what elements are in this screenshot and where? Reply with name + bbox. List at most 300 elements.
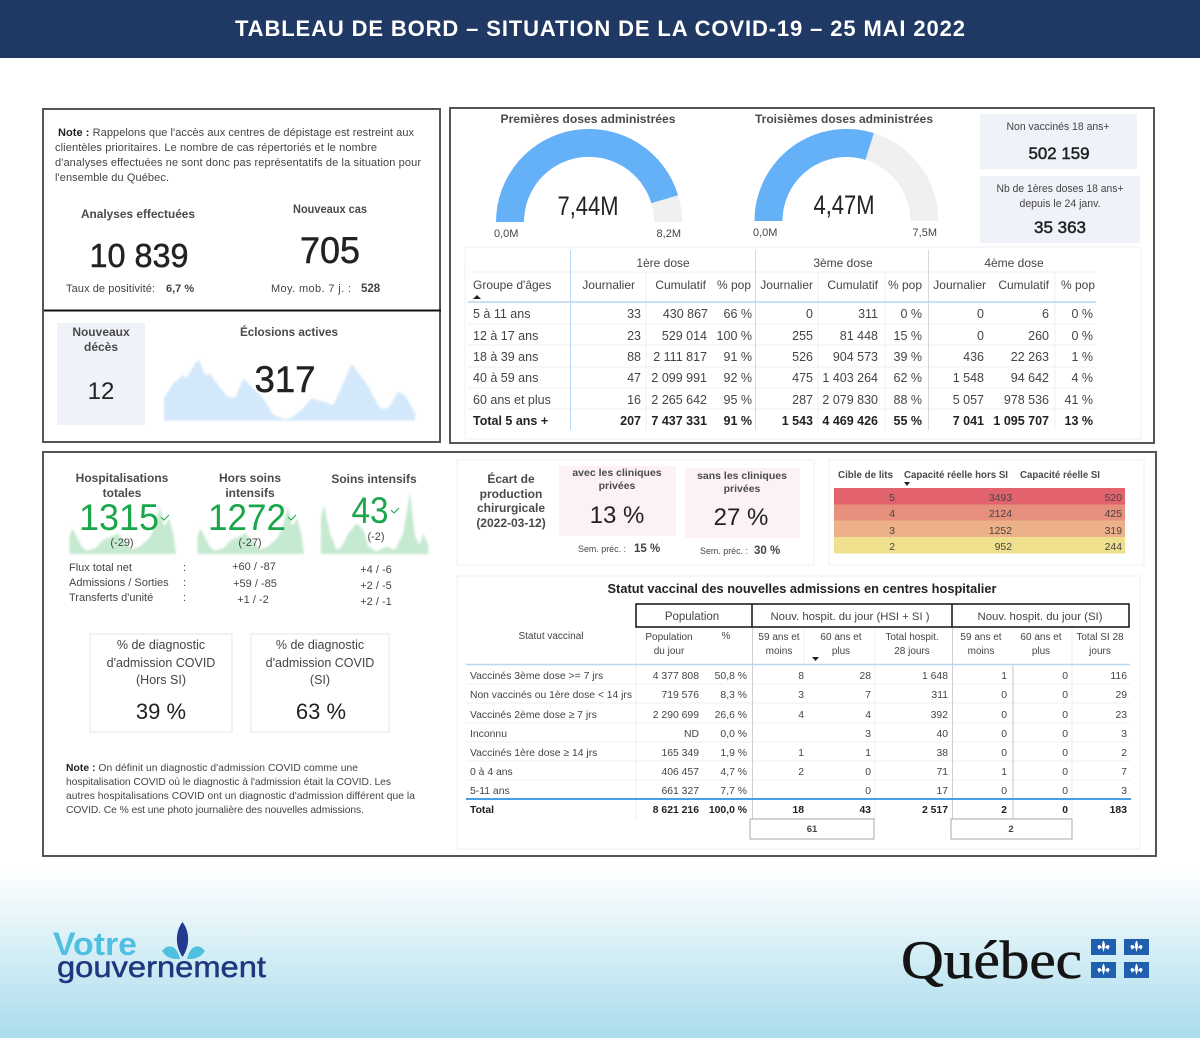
row: 5 à 11 ans: 0 %	[900, 307, 922, 321]
row: total: Total	[470, 805, 494, 816]
card: sans les cliniques privées: privées	[724, 483, 761, 495]
KPI: hospitalisations totales: (-29)	[110, 537, 134, 549]
logo: Québec	[901, 930, 1149, 990]
row: 18 à 39 ans	[473, 350, 1093, 364]
column headers: Groupe d'âges	[473, 278, 551, 292]
column headers: 59 ans et	[758, 632, 800, 643]
row: inconnu: 0,0 %	[720, 729, 747, 740]
row: 60 ans et plus: 2 079 830	[822, 393, 878, 407]
row: total: 43	[859, 805, 871, 816]
flow breakdown rows: +2 / -1	[360, 596, 392, 608]
flow breakdown rows: Admissions / Sorties	[69, 577, 169, 589]
row: 5-11 ans: 0	[1062, 786, 1068, 797]
card: sans les cliniques privées	[685, 468, 800, 557]
logo: Votre gouvernement	[53, 922, 267, 984]
KPI: hospitalisations totales: Hospitalisations	[76, 471, 169, 485]
flow breakdown rows: :	[183, 592, 186, 604]
row: cible 2: 2	[889, 542, 895, 553]
row: 60 ans et plus	[473, 393, 1093, 407]
sparkline: soins intensifs	[321, 492, 428, 554]
flow breakdown rows: +59 / -85	[233, 578, 277, 590]
row: 18 à 39 ans: 39 %	[894, 350, 922, 364]
row: 40 à 59 ans	[473, 371, 1093, 385]
table: doses par groupe d'âges	[465, 247, 1141, 439]
row: 18 à 39 ans: 88	[627, 350, 641, 364]
gauge: premières doses	[494, 112, 682, 240]
column headers: Cumulatif	[998, 278, 1050, 292]
grouped header box: Population	[665, 611, 719, 623]
row: inconnu: 40	[936, 729, 948, 740]
KPI card: nouveaux décès	[57, 323, 145, 425]
KPI: soins intensifs: Soins intensifs	[331, 472, 417, 486]
testing note	[55, 127, 421, 184]
row: 18 à 39 ans: 436	[963, 350, 984, 364]
sparkline: éclosions actives	[164, 360, 415, 421]
row: 5 à 11 ans: 66 %	[724, 307, 752, 321]
KPI: nouveaux cas: 528	[361, 283, 381, 295]
sparkline: hospitalisations totales	[69, 507, 176, 554]
column headers: 28 jours	[894, 646, 930, 657]
gauge: troisièmes doses: 4,47M	[814, 190, 874, 220]
row: total: 183	[1110, 805, 1127, 816]
row: vaccinés 1re dose: Vaccinés 1ère dose ≥ 14 jrs	[470, 748, 597, 759]
column headers: 59 ans et	[960, 632, 1002, 643]
KPI: analyses effectuées: Taux de positivité:	[66, 283, 155, 295]
card: sans les cliniques privées: sans les cliniques	[697, 470, 787, 482]
row: vaccinés 3e dose: Vaccinés 3ème dose >= 7 jrs	[470, 671, 603, 682]
flow breakdown rows: +1 / -2	[237, 594, 269, 606]
KPI: analyses effectuées	[66, 207, 195, 295]
row: 5 à 11 ans: 0	[977, 307, 984, 321]
row: cible 2: 952	[995, 542, 1012, 553]
row: 12 à 17 ans: 0 %	[1071, 329, 1093, 343]
KPI card: premières doses depuis le 24 janvier	[980, 176, 1140, 243]
flow breakdown rows: Transferts d'unité	[69, 592, 153, 604]
total box: hospit. du jour: 61	[807, 824, 818, 835]
KPI card: diagnostic COVID SI: % de diagnostic	[276, 638, 364, 652]
grouped header box	[636, 604, 1129, 627]
column headers: 60 ans et	[1020, 632, 1062, 643]
card: avec les cliniques privées: avec les cliniques	[572, 467, 662, 479]
row: 12 à 17 ans	[473, 329, 1093, 343]
grouped header box: Nouv. hospit. du jour (SI)	[978, 611, 1102, 623]
KPI: nouveaux cas: Nouveaux cas	[293, 204, 367, 216]
card: sans les cliniques privées: 30 %	[754, 545, 780, 557]
row: 18 à 39 ans: 904 573	[833, 350, 878, 364]
row: vaccinés 3e dose: 4 377 808	[653, 671, 699, 682]
row: 0 à 4 ans: 0	[865, 767, 871, 778]
row: total 5 ans et plus: 55 %	[894, 414, 922, 428]
column headers: moins	[968, 646, 994, 657]
row: 12 à 17 ans: 0	[977, 329, 984, 343]
row: vaccinés 1re dose	[470, 748, 1127, 759]
KPI: hospitalisations totales: totales	[103, 486, 142, 500]
gauge: troisièmes doses: 7,5M	[913, 227, 937, 239]
row: cible 4	[834, 504, 1125, 520]
row: total 5 ans et plus: 7 041	[953, 414, 984, 428]
capacity header: Capacité réelle hors SI	[904, 469, 1008, 481]
column headers: % pop	[717, 278, 751, 292]
row: inconnu: ND	[684, 729, 699, 740]
section label: chirurgicale	[477, 501, 545, 515]
row: inconnu: 0	[1001, 729, 1007, 740]
row: cible 3	[834, 520, 1125, 537]
row: 5-11 ans: 661 327	[661, 786, 699, 797]
flow breakdown rows	[69, 561, 392, 608]
row: 5-11 ans	[470, 786, 1127, 797]
row: vaccinés 3e dose: 1	[1001, 671, 1007, 682]
row: 5-11 ans: 7,7 %	[720, 786, 747, 797]
gauge: premières doses: 8,2M	[657, 228, 681, 240]
flow breakdown rows: +2 / -5	[360, 580, 392, 592]
row: 60 ans et plus: 41 %	[1064, 393, 1093, 407]
row: vaccinés 3e dose	[470, 671, 1127, 682]
column headers: Total SI 28	[1076, 632, 1124, 643]
KPI card: non vaccinés: 502 159	[1028, 144, 1090, 163]
KPI card: non vaccinés: Non vaccinés 18 ans+	[1006, 121, 1110, 133]
row: inconnu: 3	[865, 729, 871, 740]
panel: capacité de lits	[829, 460, 1144, 565]
row: cible 4: 4	[889, 509, 895, 520]
column headers	[518, 631, 1124, 661]
table title: Statut vaccinal des nouvelles admissions en centres hospitalier	[608, 581, 996, 596]
column headers: Population	[645, 632, 693, 643]
row: non vaccinés	[470, 690, 1127, 701]
column headers: du jour	[654, 646, 685, 657]
row: vaccinés 2e dose: 4	[798, 710, 804, 721]
column headers: %	[722, 631, 731, 642]
sparkline: hors soins intensifs	[197, 507, 304, 554]
row: non vaccinés: 7	[865, 690, 871, 701]
row: 18 à 39 ans: 22 263	[1011, 350, 1049, 364]
row: inconnu: Inconnu	[470, 729, 507, 740]
KPI: éclosions actives: Éclosions actives	[240, 324, 338, 339]
testing note: Note : Rappelons que l'accès aux centres de dépistage est restreint aux	[58, 127, 414, 139]
row: non vaccinés: 3	[798, 690, 804, 701]
header banner	[0, 0, 1200, 58]
row: 12 à 17 ans: 255	[792, 329, 813, 343]
row: non vaccinés: Non vaccinés ou 1ère dose < 14 jrs	[470, 690, 632, 701]
dose group headers: 4ème dose	[984, 256, 1044, 270]
KPI: soins intensifs: 43	[352, 490, 388, 531]
row: 60 ans et plus: 2 265 642	[651, 393, 707, 407]
row: 18 à 39 ans: 18 à 39 ans	[473, 350, 538, 364]
icon: fleur-de-lis	[162, 922, 205, 959]
row: total 5 ans et plus: 207	[620, 414, 641, 428]
row: 5-11 ans: 0	[1001, 786, 1007, 797]
KPI card: diagnostic COVID hors SI: 39 %	[136, 699, 186, 724]
panel: vaccination	[450, 108, 1154, 443]
testing note: d'analyses effectuées ne sont donc pas représentatifs de la situation pour	[55, 157, 421, 169]
flow breakdown rows: +4 / -6	[360, 564, 392, 576]
diagnostic note: hospitalisation COVID où le diagnostic à l'admission était la COVID. Les	[66, 777, 391, 788]
row: 40 à 59 ans: 47	[627, 371, 641, 385]
row: 0 à 4 ans: 0	[1062, 767, 1068, 778]
dose group headers: 1ère dose	[636, 256, 690, 270]
column headers: jours	[1088, 646, 1111, 657]
KPI card: diagnostic COVID hors SI	[90, 634, 232, 732]
row: total 5 ans et plus: 91 %	[724, 414, 752, 428]
row: 5 à 11 ans: 0 %	[1071, 307, 1093, 321]
column headers: Journalier	[582, 278, 635, 292]
KPI card: nouveaux décès: Nouveaux	[72, 325, 130, 339]
panel: hospitalisations	[43, 452, 1156, 856]
row: vaccinés 2e dose: 23	[1115, 710, 1127, 721]
row: 40 à 59 ans: 62 %	[894, 371, 922, 385]
row: 60 ans et plus: 287	[792, 393, 813, 407]
logo: Votre gouvernement: gouvernement	[57, 951, 267, 984]
KPI: nouveaux cas: Moy. mob. 7 j. :	[271, 283, 351, 295]
row: total: 0	[1062, 805, 1068, 816]
KPI: analyses effectuées: Analyses effectuées	[81, 207, 195, 221]
row: non vaccinés: 0	[1062, 690, 1068, 701]
row: 0 à 4 ans: 4,7 %	[720, 767, 747, 778]
KPI: analyses effectuées: 10 839	[90, 237, 188, 274]
row: 0 à 4 ans	[470, 767, 1127, 778]
KPI card: diagnostic COVID hors SI: d'admission COVID	[107, 656, 215, 670]
row: 60 ans et plus: 5 057	[953, 393, 984, 407]
row: total: 100,0 %	[709, 805, 747, 816]
row: cible 5	[834, 488, 1125, 504]
dose group headers	[636, 256, 1044, 270]
row: vaccinés 1re dose: 38	[936, 748, 948, 759]
row: vaccinés 3e dose: 28	[859, 671, 871, 682]
row: 5 à 11 ans: 0	[806, 307, 813, 321]
row: vaccinés 2e dose	[470, 710, 1127, 721]
row: total	[470, 805, 1127, 816]
KPI: hospitalisations totales	[76, 471, 169, 549]
row: 40 à 59 ans: 475	[792, 371, 813, 385]
row: vaccinés 3e dose: 1 648	[922, 671, 948, 682]
row: total 5 ans et plus: 13 %	[1064, 414, 1093, 428]
row: cible 3: 1252	[989, 526, 1012, 537]
row: vaccinés 2e dose: 4	[865, 710, 871, 721]
column headers: 60 ans et	[820, 632, 862, 643]
row: cible 5: 520	[1105, 493, 1122, 504]
KPI: hors soins intensifs: 1272	[208, 497, 286, 538]
gauge: premières doses: 7,44M	[558, 191, 618, 221]
row: inconnu	[470, 729, 1127, 740]
section label	[476, 471, 546, 530]
gauge: premières doses: 0,0M	[494, 228, 518, 240]
row: cible 2: 244	[1105, 542, 1122, 553]
column headers: % pop	[1061, 278, 1095, 292]
row: vaccinés 3e dose: 50,8 %	[715, 671, 747, 682]
row: 0 à 4 ans: 406 457	[661, 767, 699, 778]
row: non vaccinés: 8,3 %	[720, 690, 747, 701]
row: 5-11 ans: 17	[936, 786, 948, 797]
KPI card: premières doses depuis le 24 janvier: 35 363	[1034, 218, 1086, 237]
row: total 5 ans et plus: Total 5 ans +	[473, 414, 548, 428]
row: vaccinés 1re dose: 1	[798, 748, 804, 759]
row: total: 2	[1001, 805, 1007, 816]
panel: tests, cases, deaths, outbreaks	[43, 109, 441, 442]
row: total: 8 621 216	[653, 805, 699, 816]
row: 5-11 ans: 5-11 ans	[470, 786, 510, 797]
row: vaccinés 2e dose: 0	[1062, 710, 1068, 721]
header banner: TABLEAU DE BORD – SITUATION DE LA COVID-19 – 25 MAI 2022	[235, 16, 965, 41]
row: 12 à 17 ans: 260	[1028, 329, 1049, 343]
KPI: hors soins intensifs	[208, 471, 296, 549]
gauge: troisièmes doses: Troisièmes doses administrées	[755, 112, 933, 126]
row: 60 ans et plus: 16	[627, 393, 641, 407]
card: avec les cliniques privées: 13 %	[590, 502, 644, 529]
KPI card: non vaccinés	[980, 114, 1137, 169]
row: 0 à 4 ans: 2	[798, 767, 804, 778]
row: 40 à 59 ans: 4 %	[1071, 371, 1093, 385]
KPI card: diagnostic COVID hors SI: (Hors SI)	[136, 673, 186, 687]
KPI card: diagnostic COVID SI	[251, 634, 389, 732]
row: vaccinés 1re dose: 0	[1001, 748, 1007, 759]
gauge: troisièmes doses	[753, 112, 938, 239]
row: 5 à 11 ans: 430 867	[663, 307, 708, 321]
KPI: nouveaux cas	[271, 204, 381, 295]
row: cible 5: 3493	[989, 493, 1012, 504]
column headers	[473, 278, 1095, 299]
row: 0 à 4 ans: 1	[1001, 767, 1007, 778]
gauge: premières doses: Premières doses administrées	[500, 112, 676, 126]
KPI card: nouveaux décès: 12	[88, 378, 114, 405]
row: total 5 ans et plus: 1 095 707	[993, 414, 1049, 428]
KPI: analyses effectuées: 6,7 %	[166, 283, 194, 295]
KPI card: nouveaux décès: décès	[84, 340, 118, 354]
section label: Écart de	[487, 471, 535, 486]
KPI: éclosions actives: 317	[254, 359, 316, 400]
capacity header: Cible de lits	[838, 469, 893, 481]
row: vaccinés 1re dose: 1,9 %	[720, 748, 747, 759]
KPI card: diagnostic COVID SI: d'admission COVID	[266, 656, 374, 670]
row: 12 à 17 ans: 81 448	[840, 329, 878, 343]
row: non vaccinés: 29	[1115, 690, 1127, 701]
row: 5-11 ans: 3	[1121, 786, 1127, 797]
row: 5 à 11 ans: 311	[858, 307, 878, 321]
KPI: hors soins intensifs: (-27)	[238, 537, 262, 549]
column headers: Journalier	[933, 278, 986, 292]
row: total: 2 517	[922, 805, 948, 816]
row: vaccinés 2e dose: 392	[931, 710, 948, 721]
card: sans les cliniques privées: Sem. préc. :	[700, 546, 748, 557]
row: total 5 ans et plus: 4 469 426	[822, 414, 878, 428]
row: vaccinés 1re dose: 0	[1062, 748, 1068, 759]
card: sans les cliniques privées: 27 %	[714, 504, 768, 531]
card: avec les cliniques privées: privées	[599, 480, 636, 492]
row: total 5 ans et plus	[473, 414, 1093, 428]
diagnostic note: COVID. Ce % est une photo journalière des nouvelles admissions.	[66, 805, 364, 816]
row: 60 ans et plus: 978 536	[1004, 393, 1049, 407]
row: 12 à 17 ans: 23	[627, 329, 641, 343]
KPI card: premières doses depuis le 24 janvier: Nb de 1ères doses 18 ans+	[996, 183, 1124, 195]
column headers: Total hospit.	[885, 632, 939, 643]
row: 60 ans et plus: 60 ans et plus	[473, 393, 551, 407]
row: 0 à 4 ans: 7	[1121, 767, 1127, 778]
row: cible 3: 3	[889, 526, 895, 537]
column headers: Journalier	[760, 278, 813, 292]
row: 5 à 11 ans: 6	[1042, 307, 1049, 321]
KPI card: premières doses depuis le 24 janvier: depuis le 24 janv.	[1020, 198, 1100, 210]
diagnostic note	[66, 763, 415, 816]
row: 60 ans et plus: 88 %	[894, 393, 922, 407]
row: 18 à 39 ans: 91 %	[724, 350, 752, 364]
KPI: hors soins intensifs: intensifs	[225, 486, 275, 500]
column headers: Cumulatif	[827, 278, 879, 292]
capacity header: Capacité réelle SI	[1020, 469, 1100, 481]
flow breakdown rows: :	[183, 577, 186, 589]
row: 40 à 59 ans: 40 à 59 ans	[473, 371, 538, 385]
gauge: troisièmes doses: 0,0M	[753, 227, 777, 239]
column headers: moins	[766, 646, 792, 657]
row: inconnu: 0	[1062, 729, 1068, 740]
row: 5-11 ans: 0	[865, 786, 871, 797]
logo: Québec: Québec	[901, 930, 1082, 990]
row: vaccinés 2e dose: Vaccinés 2ème dose ≥ 7 jrs	[470, 710, 597, 721]
row: 12 à 17 ans: 15 %	[894, 329, 922, 343]
row: 5 à 11 ans: 5 à 11 ans	[473, 307, 530, 321]
row: 12 à 17 ans: 529 014	[662, 329, 707, 343]
KPI: hospitalisations totales: 1315	[79, 497, 159, 538]
KPI: hors soins intensifs: Hors soins	[219, 471, 281, 485]
diagnostic note: Note : On définit un diagnostic d'admission COVID comme une	[66, 763, 358, 774]
KPI: éclosions actives	[240, 324, 338, 400]
row: 5 à 11 ans	[473, 307, 1093, 321]
KPI: soins intensifs	[331, 472, 417, 543]
row: 12 à 17 ans: 12 à 17 ans	[473, 329, 538, 343]
flow breakdown rows: :	[183, 562, 186, 574]
logo: Votre gouvernement: Votre	[53, 926, 137, 962]
row: cible 4: 425	[1105, 509, 1122, 520]
row: vaccinés 3e dose: 116	[1110, 671, 1127, 682]
row: 18 à 39 ans: 1 %	[1071, 350, 1093, 364]
row: non vaccinés: 0	[1001, 690, 1007, 701]
testing note: l'ensemble du Québec.	[55, 172, 169, 184]
row: vaccinés 1re dose: 165 349	[661, 748, 699, 759]
column headers: % pop	[888, 278, 922, 292]
total box: SI du jour: 2	[1008, 824, 1014, 835]
total box: hospit. du jour	[750, 819, 874, 839]
card: avec les cliniques privées: 15 %	[634, 543, 660, 555]
row: 18 à 39 ans: 2 111 817	[653, 350, 707, 364]
panel: écart de production chirurgicale	[457, 460, 814, 565]
row: cible 4: 2124	[989, 509, 1012, 520]
row: 12 à 17 ans: 100 %	[717, 329, 752, 343]
section label: production	[480, 487, 542, 501]
row: vaccinés 1re dose: 2	[1121, 748, 1127, 759]
KPI: nouveaux cas: 705	[300, 230, 360, 271]
KPI card: diagnostic COVID hors SI: % de diagnostic	[117, 638, 205, 652]
row: vaccinés 1re dose: 1	[865, 748, 871, 759]
column headers: plus	[832, 646, 850, 657]
dose group headers: 3ème dose	[813, 256, 873, 270]
row: total: 18	[792, 805, 804, 816]
KPI card: diagnostic COVID SI: (SI)	[310, 673, 330, 687]
row: vaccinés 2e dose: 26,6 %	[715, 710, 747, 721]
row: vaccinés 2e dose: 0	[1001, 710, 1007, 721]
row: total 5 ans et plus: 1 543	[782, 414, 813, 428]
row: inconnu: 3	[1121, 729, 1127, 740]
row: 40 à 59 ans: 94 642	[1011, 371, 1049, 385]
row: total 5 ans et plus: 7 437 331	[651, 414, 707, 428]
row: 5 à 11 ans: 33	[627, 307, 641, 321]
flow breakdown rows: Flux total net	[69, 562, 132, 574]
row: 40 à 59 ans: 2 099 991	[651, 371, 707, 385]
row: 0 à 4 ans: 0 à 4 ans	[470, 767, 513, 778]
row: cible 5: 5	[889, 493, 895, 504]
flow breakdown rows: +60 / -87	[232, 561, 276, 573]
card: avec les cliniques privées	[559, 466, 676, 555]
row: cible 2	[834, 537, 1125, 554]
capacity header	[838, 469, 1100, 486]
row: 0 à 4 ans: 71	[936, 767, 948, 778]
row: 18 à 39 ans: 526	[792, 350, 813, 364]
